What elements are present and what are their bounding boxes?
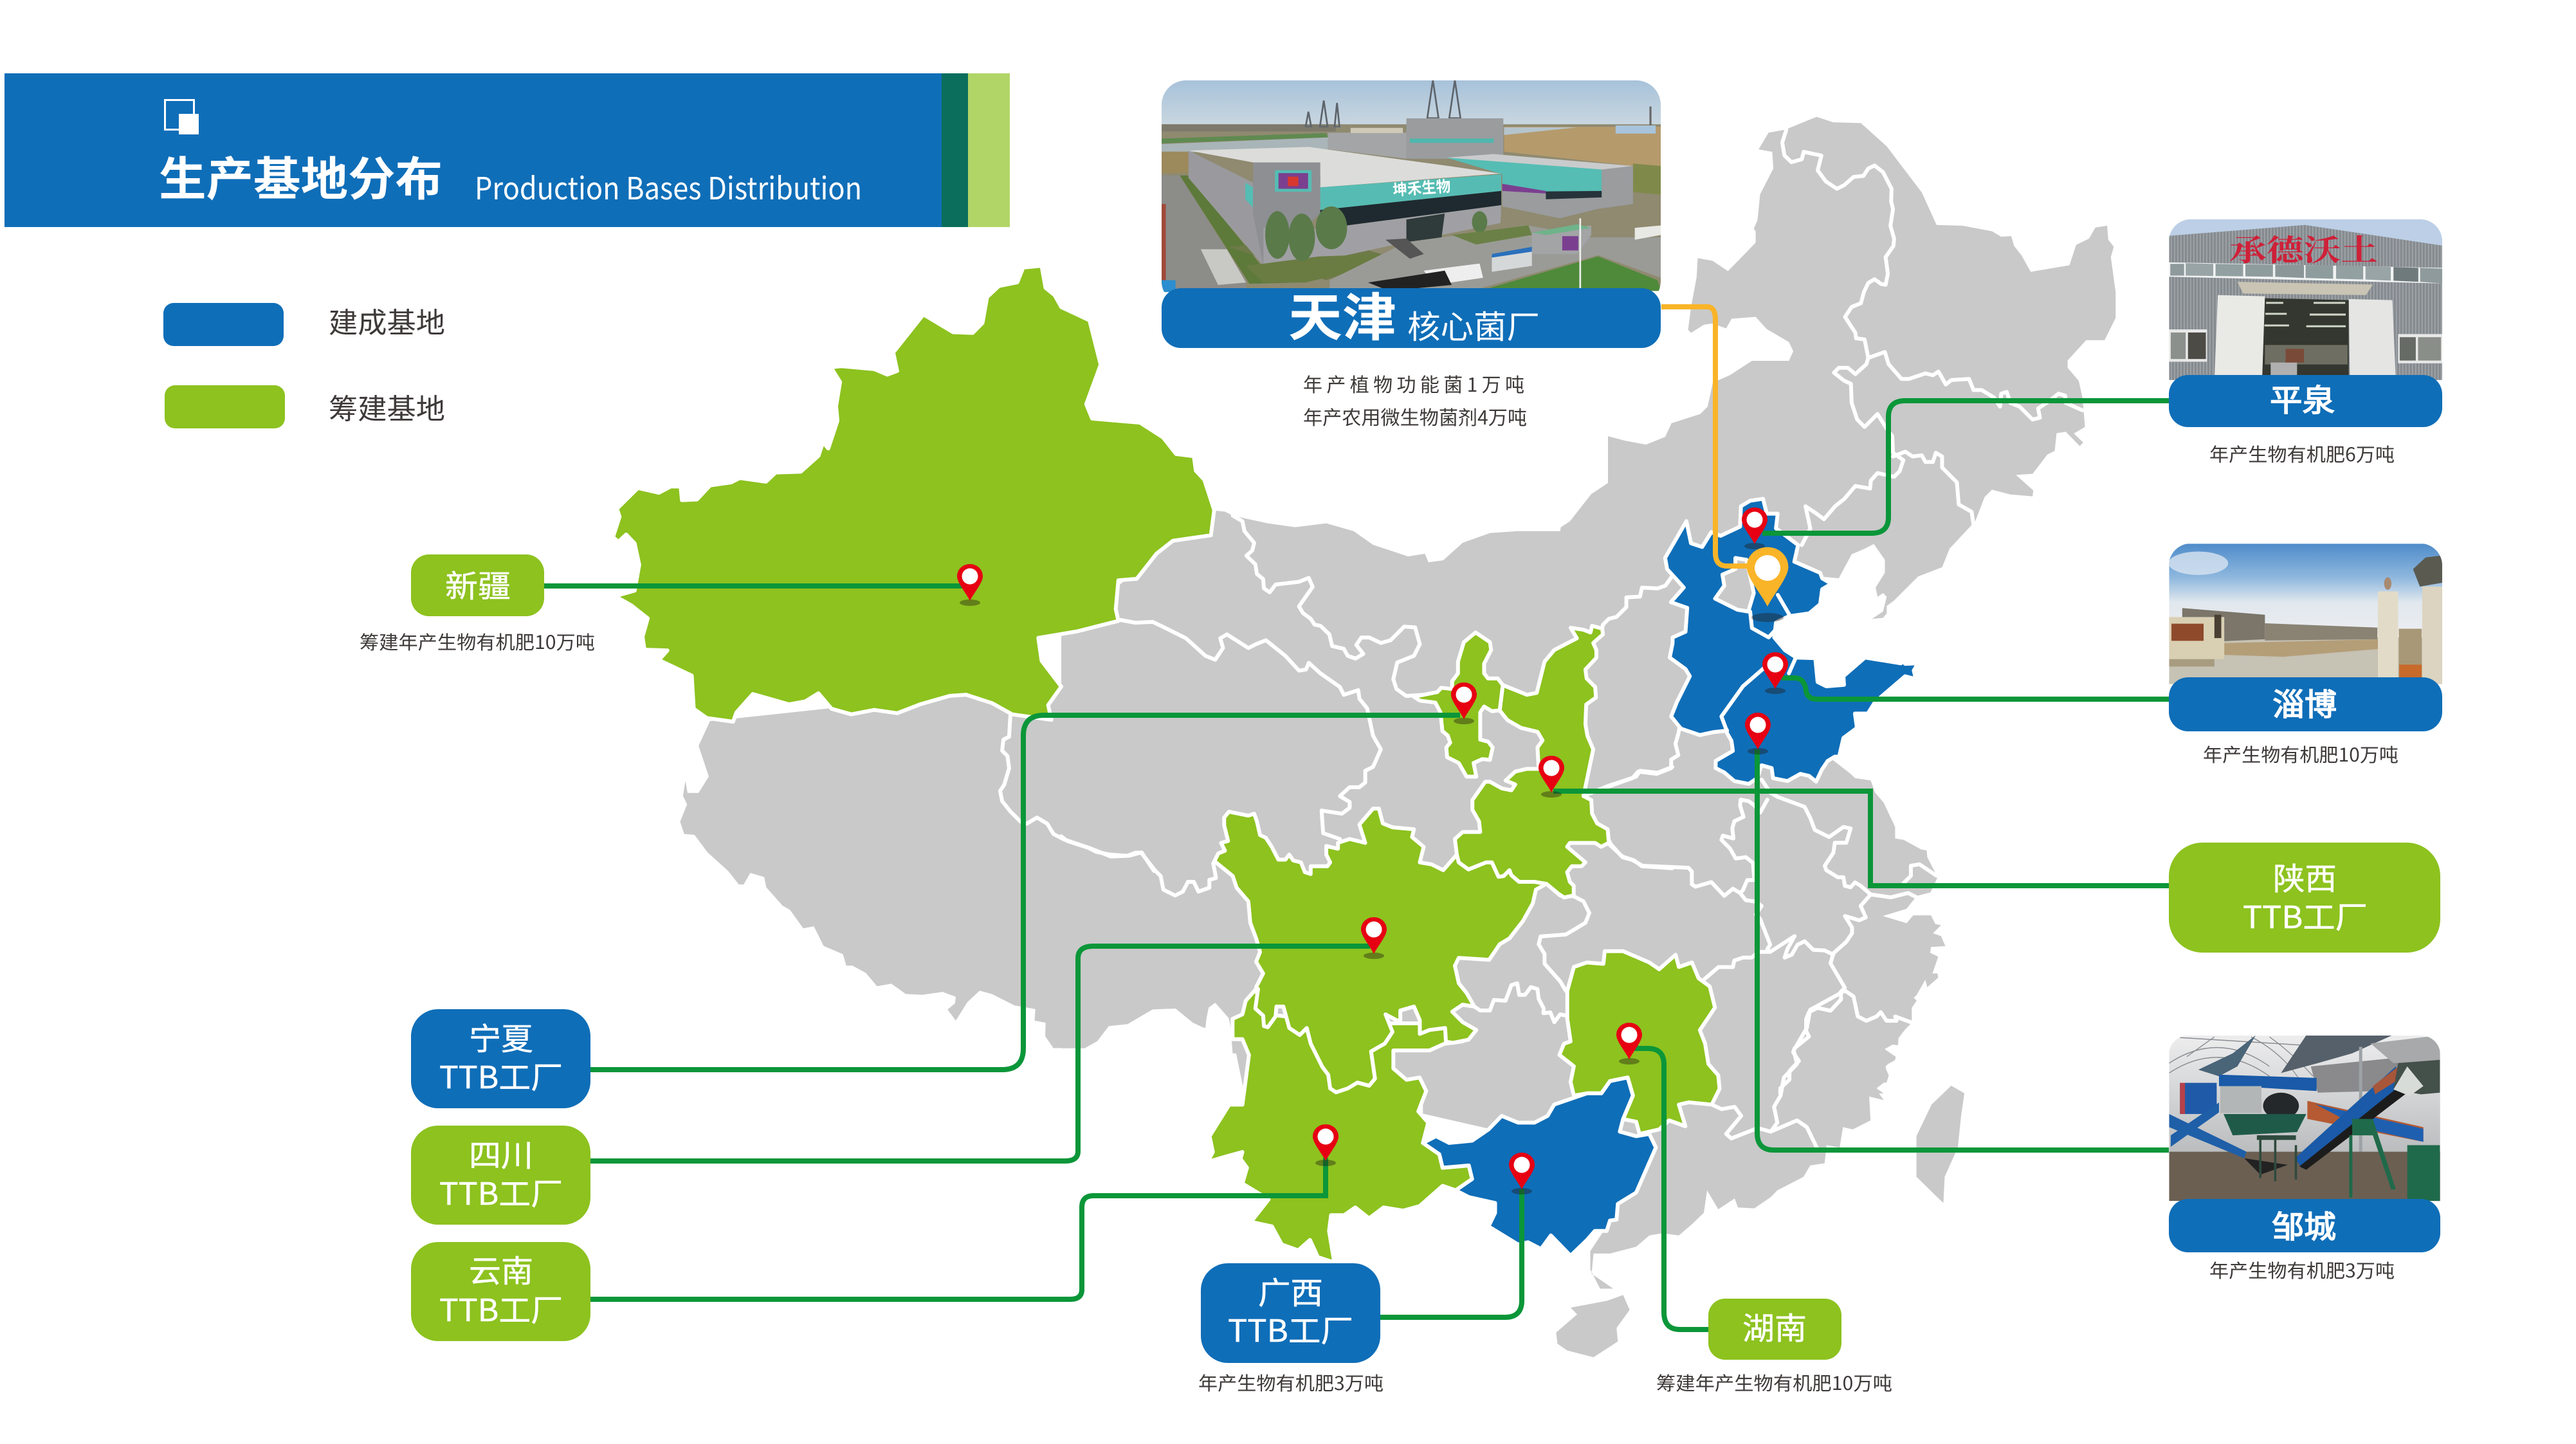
label: Guangxi: 广西 <box>1258 1268 1323 1313</box>
label: Sichuan <box>411 1126 590 1225</box>
connector: Tianjin <box>1661 307 1749 566</box>
grey province borders <box>1000 130 2083 1147</box>
label bar <box>2169 1199 2440 1252</box>
label: Xinjiang <box>360 554 595 655</box>
panel: Pingquan <box>2169 216 2442 467</box>
label: Shaanxi <box>2169 843 2440 953</box>
province: Hunan <box>1559 951 1719 1134</box>
province: Shaanxi <box>1455 626 1609 897</box>
province: Ningxia <box>1414 632 1503 776</box>
panel: Tianjin core plant <box>1162 80 1661 430</box>
province: Yunnan <box>1208 989 1472 1263</box>
label: Ningxia <box>411 1009 590 1108</box>
grey land <box>680 117 2115 1357</box>
label: Zoucheng: 邹城 <box>2272 1202 2336 1247</box>
pin: Zibo <box>1762 652 1788 694</box>
label bar <box>2169 677 2442 731</box>
label bar <box>1162 288 1661 348</box>
icon: overlapping squares <box>165 100 199 134</box>
label: Xinjiang: 新疆 <box>445 561 511 606</box>
label: Sichuan: 四川 <box>469 1130 533 1175</box>
label: Hunan <box>1656 1299 1892 1396</box>
subtitle: Production Bases Distribution <box>475 163 862 208</box>
label: Guangxi <box>1198 1263 1384 1396</box>
province: Beijing area <box>1715 558 1754 612</box>
title: 生产基地分布 <box>159 142 443 209</box>
legend: 筹建基地 <box>329 386 445 427</box>
photo: Tianjin factory <box>1162 80 1661 292</box>
label: Guangxi: 年产生物有机肥3万吨 <box>1198 1369 1384 1396</box>
label: Yunnan <box>411 1242 590 1341</box>
blue province inner borders <box>1721 595 1796 731</box>
panel: Zoucheng <box>2169 1034 2440 1283</box>
pin: Xinjiang <box>957 564 983 606</box>
header banner <box>5 73 1010 227</box>
pin: Ningxia <box>1451 682 1477 724</box>
caption: 年产植物功能菌1万吨 <box>1303 369 1524 398</box>
label: Shaanxi: 陕西 <box>2273 854 2337 899</box>
province: Sichuan <box>1213 809 1546 1092</box>
photo: Pingquan factory <box>2169 216 2442 380</box>
photo sign: 坤禾生物 <box>1392 174 1451 200</box>
photo: Zibo factory <box>2168 544 2443 685</box>
pin: Sichuan <box>1361 917 1387 959</box>
legend <box>163 300 445 428</box>
legend: 建成基地 <box>329 300 445 341</box>
caption: 年产生物有机肥10万吨 <box>2203 740 2398 767</box>
pin: Yunnan <box>1313 1124 1338 1166</box>
pin: Guangxi <box>1509 1153 1535 1194</box>
label: Ningxia: TTB工厂 <box>439 1052 563 1097</box>
label: Xinjiang: 筹建年产生物有机肥10万吨 <box>360 628 595 655</box>
label: Yunnan: 云南 <box>469 1246 533 1291</box>
label: Sichuan: TTB工厂 <box>439 1169 563 1214</box>
province: Xinjiang <box>613 266 1214 722</box>
label: Ningxia: 宁夏 <box>469 1014 533 1059</box>
label: Shaanxi: TTB工厂 <box>2243 892 2368 937</box>
label: Guangxi: TTB工厂 <box>1228 1306 1353 1351</box>
pin: Pingquan <box>1742 507 1768 549</box>
label: Hunan: 湖南 <box>1742 1303 1807 1348</box>
pin: Shaanxi <box>1539 756 1564 798</box>
label bar <box>2169 375 2442 427</box>
map of China <box>613 117 2115 1357</box>
label: Pingquan: 平泉 <box>2270 375 2335 420</box>
caption: 年产生物有机肥3万吨 <box>2209 1256 2395 1283</box>
label: core plant: 核心菌厂 <box>1407 302 1540 348</box>
label: Yunnan: TTB工厂 <box>439 1285 563 1330</box>
label: Tianjin: 天津 <box>1288 277 1396 351</box>
label: Hunan: 筹建年产生物有机肥10万吨 <box>1656 1369 1892 1396</box>
label: Zibo: 淄博 <box>2272 679 2337 724</box>
photo: Zoucheng factory <box>2169 1034 2440 1201</box>
map pins <box>957 507 1788 1194</box>
pin: Zoucheng <box>1745 713 1771 754</box>
provinces: Hebei and Shandong <box>1665 498 1918 784</box>
province: Guangxi <box>1423 1077 1656 1256</box>
Hainan <box>1556 1295 1630 1357</box>
Taiwan <box>1917 1086 1964 1203</box>
caption: 年产农用微生物菌剂4万吨 <box>1303 402 1527 430</box>
panel: Zibo <box>2168 544 2443 767</box>
pin: Hunan <box>1616 1023 1642 1065</box>
connectors <box>544 401 2169 1330</box>
photo sign: 承德沃土 <box>2229 227 2378 270</box>
pin: Tianjin <box>1747 547 1788 622</box>
caption <box>1303 369 1527 430</box>
caption: 年产生物有机肥6万吨 <box>2209 440 2395 467</box>
